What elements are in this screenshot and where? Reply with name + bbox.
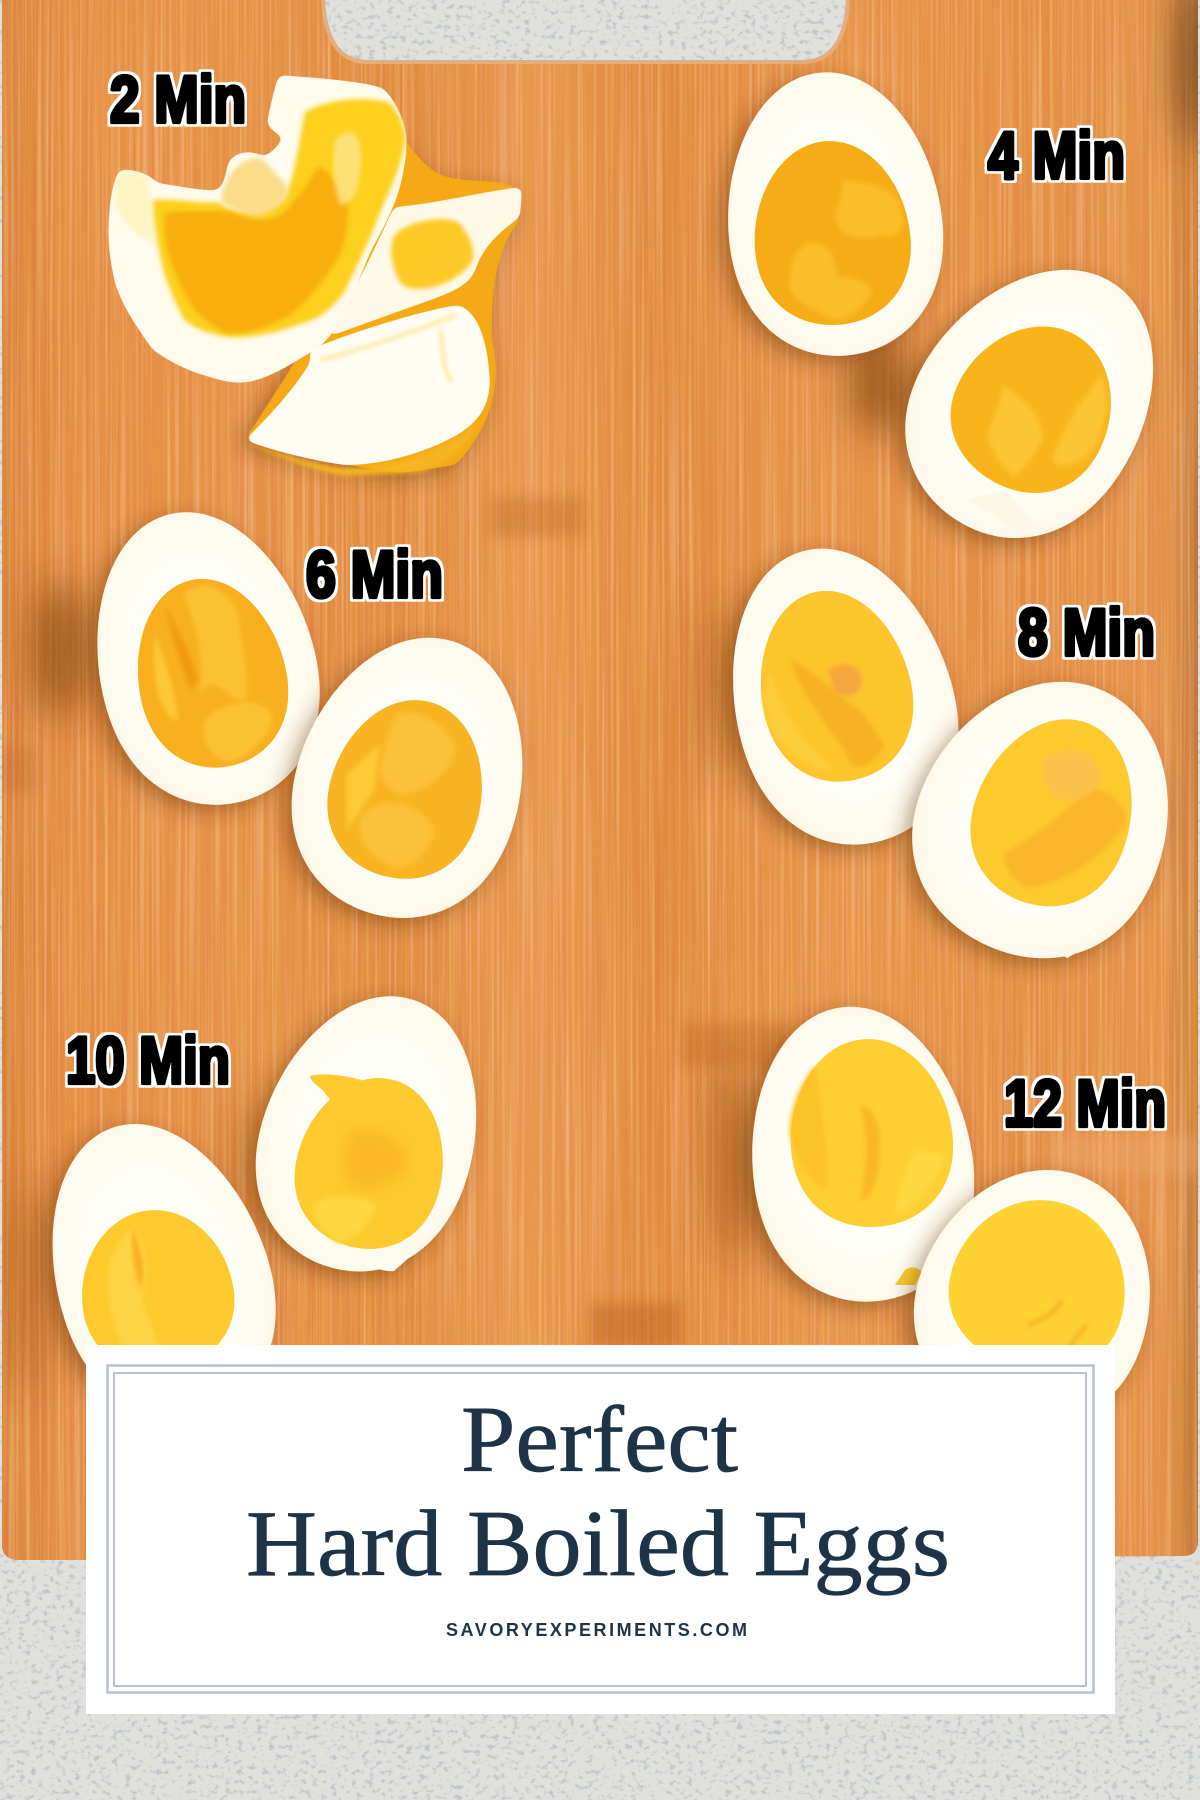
right egg piece [325, 187, 522, 338]
yolk: 8 min right [948, 696, 1160, 928]
yolk folds: 4 min bottom [988, 375, 1107, 477]
egg pair: 12 minutes [731, 992, 1189, 1456]
yolk: 8 min left [742, 577, 928, 795]
egg white: 12 min right [883, 1136, 1189, 1456]
soft orange yolk [164, 167, 348, 333]
egg pair: 6 minutes [64, 488, 560, 946]
bright rim of the yolk [153, 99, 405, 337]
egg white: 12 min left [731, 992, 991, 1316]
bamboo joints and dark patches [0, 497, 1200, 1348]
egg white: 6 min right [262, 608, 560, 946]
eggs: 2 minute broken egg [108, 75, 522, 476]
egg white: 8 min right [873, 639, 1200, 997]
yolk: 4 min top [748, 136, 916, 330]
yolk: 10 min right [278, 1061, 464, 1265]
website: SAVORYEXPERIMENTS.COM [446, 1620, 747, 1640]
title line 2: Hard Boiled Eggs [246, 1492, 950, 1596]
egg pair: 8 minutes [698, 523, 1200, 997]
white egg flap [222, 158, 288, 216]
runny yolk behind [245, 130, 520, 473]
label: 4 Min: 4 Min [988, 118, 1125, 192]
yolk: 10 min left [71, 1200, 243, 1380]
label: 6 Min: 6 Min [306, 537, 443, 611]
title line 1: Perfect [461, 1388, 738, 1492]
yolk: 4 min bottom [924, 296, 1144, 520]
egg white: 10 min left [13, 1095, 307, 1445]
egg pair: 4 minutes [713, 62, 1200, 582]
label: 2 Min: 2 Min [110, 62, 246, 136]
yolk folds: 4 min top [789, 180, 903, 319]
title panel [86, 1345, 1115, 1714]
egg white: 10 min right [226, 967, 514, 1299]
egg white: 6 min left [64, 488, 346, 828]
egg pair: 10 minutes [13, 967, 514, 1445]
big front egg piece [108, 75, 407, 383]
yolk: 6 min left [119, 565, 303, 781]
label: 10 Min: 10 Min [66, 1023, 230, 1097]
yolk: 6 min right [310, 682, 504, 896]
bottom egg piece [245, 420, 478, 476]
egg white: 4 min bottom [861, 220, 1200, 582]
yolk: 12 min left [782, 1032, 960, 1234]
label: 8 Min: 8 Min [1018, 595, 1155, 669]
egg white: 8 min left [698, 523, 986, 869]
yolk: 12 min right [932, 1180, 1146, 1390]
egg white: 4 min top [713, 62, 955, 366]
